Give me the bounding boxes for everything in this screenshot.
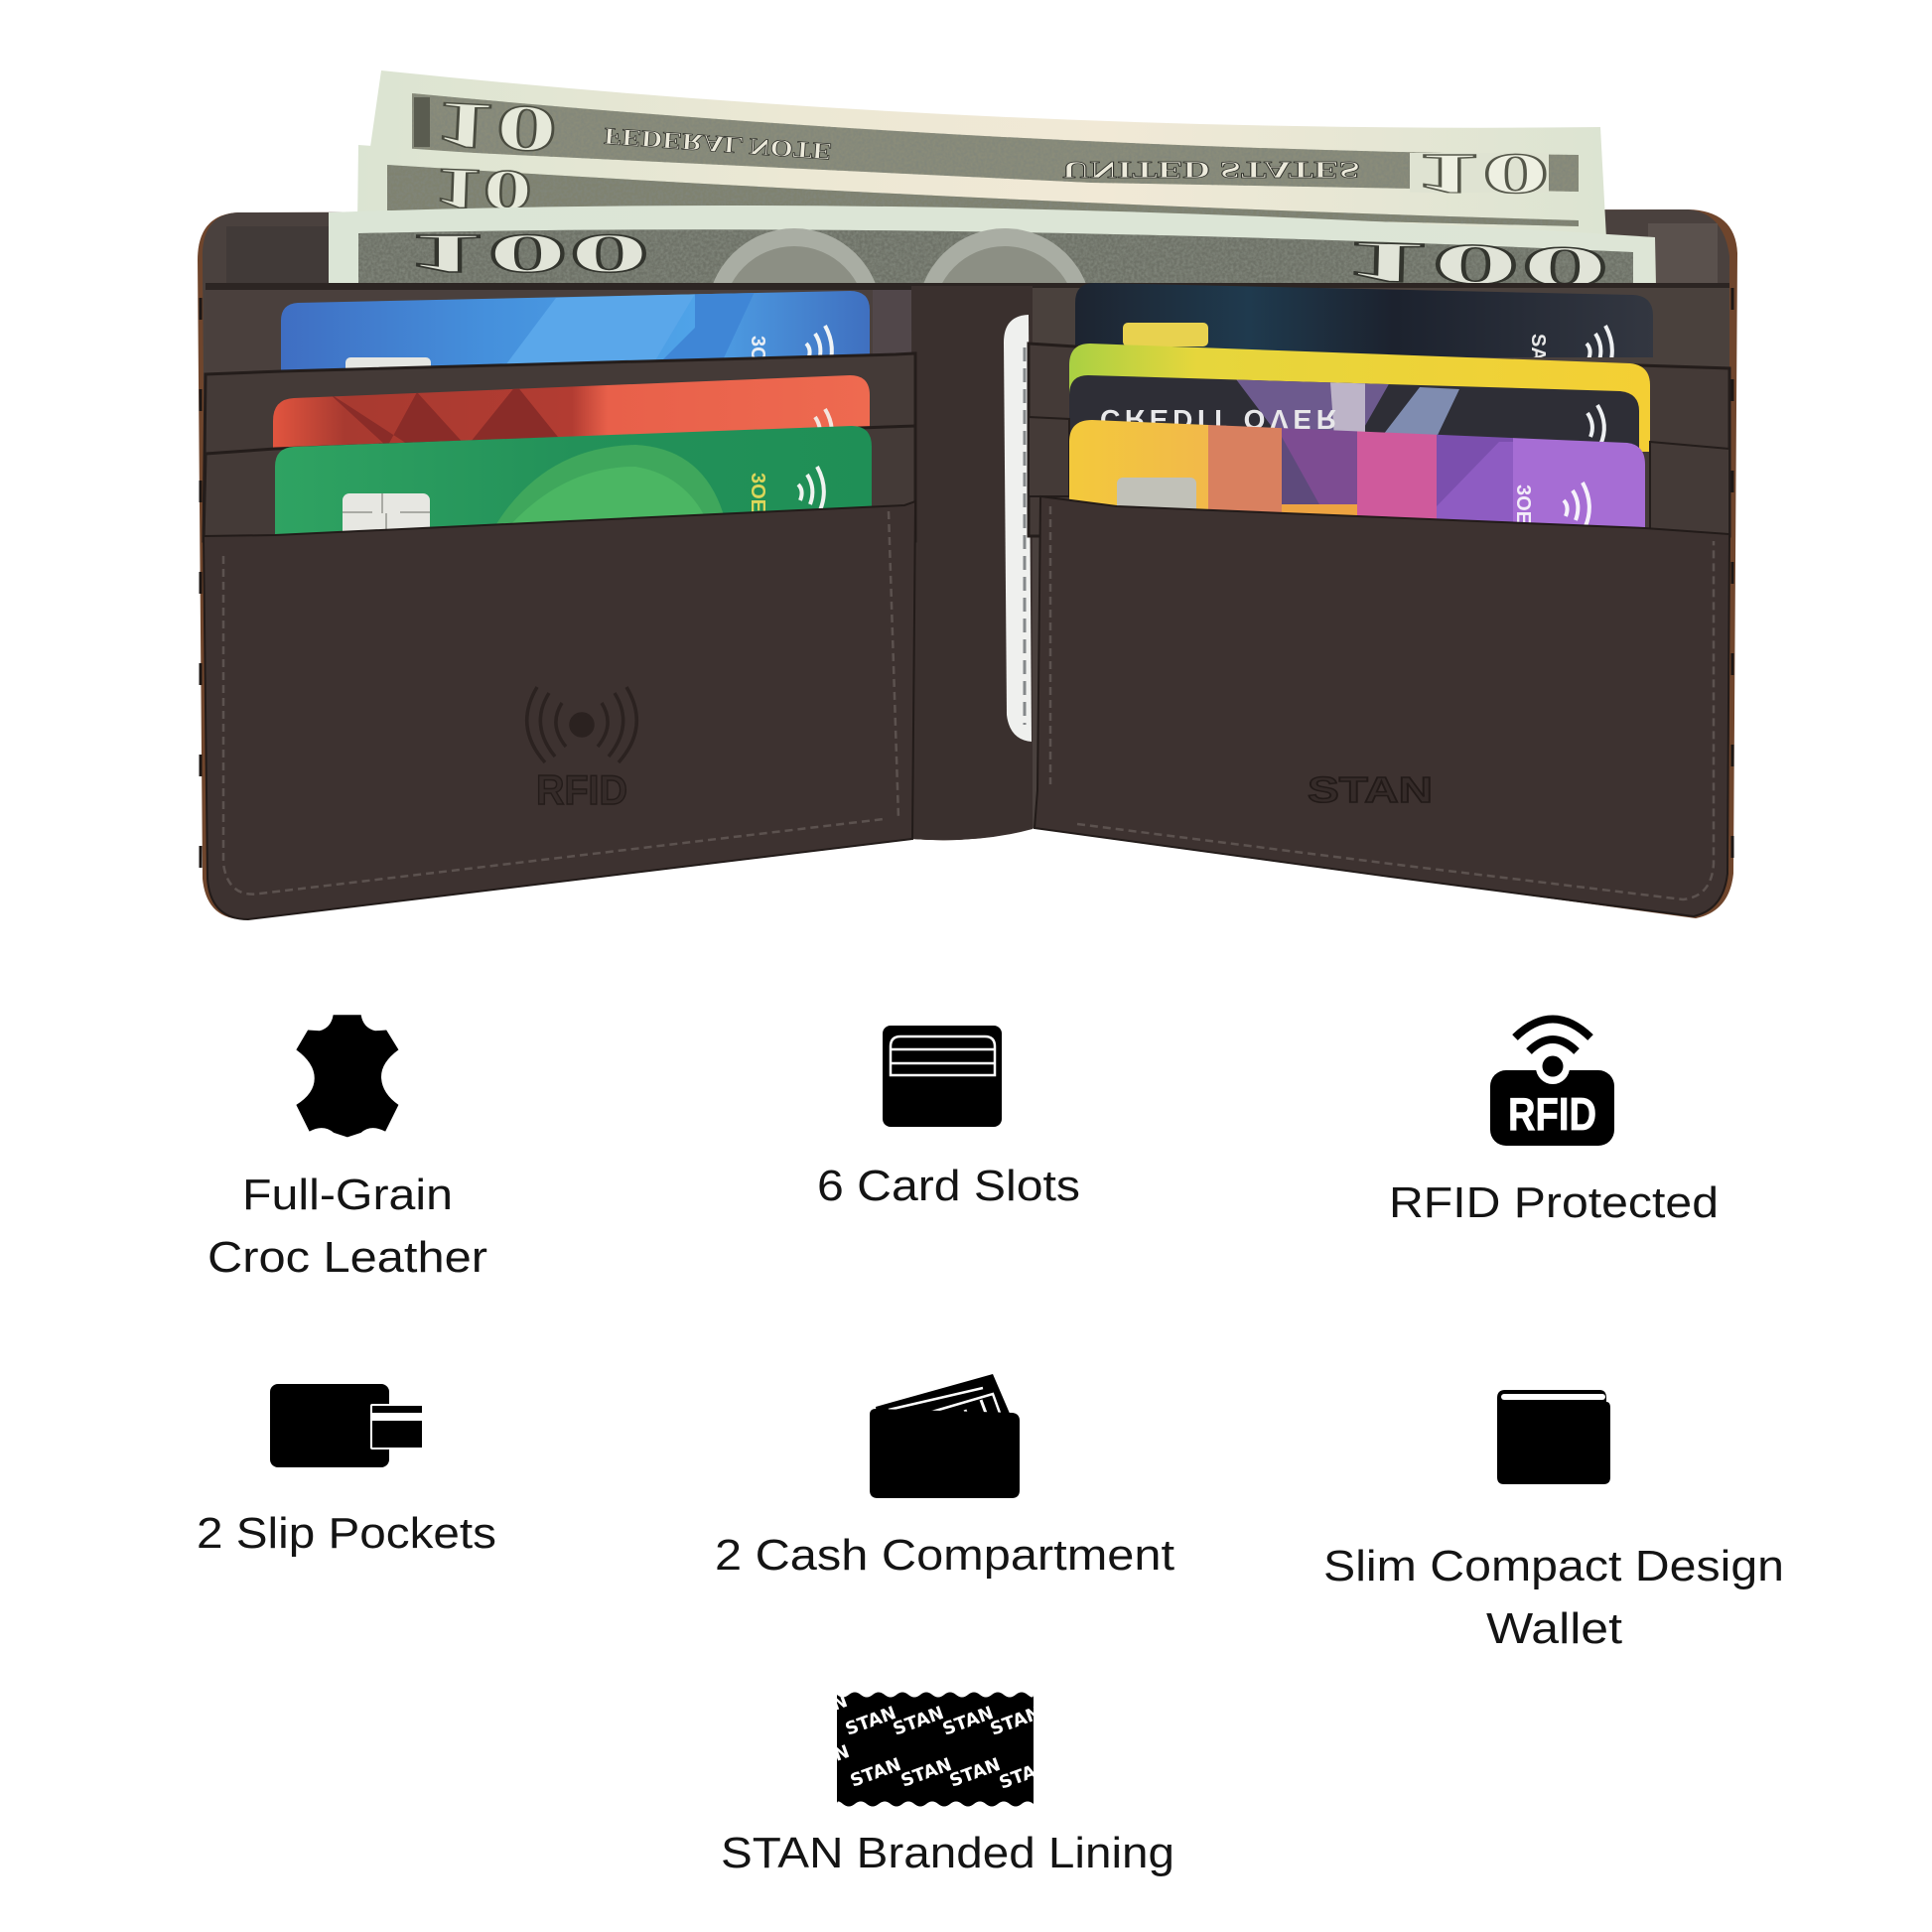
feature: full-grain croc leather (207, 1015, 487, 1282)
wallet photo (198, 70, 1737, 919)
icon: card holder (883, 1026, 1002, 1127)
right slots: dark card (1075, 283, 1653, 357)
feature: RFID protected (1389, 1019, 1719, 1227)
left slots: blue card (281, 291, 870, 369)
right slots: dark credit card (1069, 373, 1640, 453)
text: Full-Grain Croc Leather: Croc Leather (207, 1233, 487, 1282)
text: RFID emboss: RFID (536, 766, 627, 813)
text: 2 Cash Compartment: 2 Cash Compartment (715, 1531, 1174, 1580)
text: RFID Protected: RFID Protected (1389, 1178, 1719, 1227)
white card in centre slot (1004, 315, 1032, 742)
right slots: dark card: SA (1527, 334, 1549, 361)
banknote: front hundred dollar bill (329, 206, 1656, 403)
left slots: second leather band (204, 426, 915, 541)
infographic: wallet product features (198, 70, 1781, 1876)
left slots: green card: 3OE (747, 473, 768, 512)
right slots: left stitched strip (1029, 417, 1069, 496)
icon: lining swatch (837, 1692, 1034, 1807)
text: 2 Slip Pockets: 2 Slip Pockets (197, 1509, 496, 1558)
text: Full-Grain Croc Leather: Full-Grain (242, 1171, 453, 1219)
banknote: back ten dollar bill: FEDERAL NOTE (604, 122, 833, 164)
feature: slim compact design wallet (1323, 1390, 1784, 1653)
banknote: front hundred dollar bill: 100 (405, 222, 650, 284)
icon: lining swatch: STAN (947, 1754, 1004, 1792)
banknote: back ten dollar bill: 10 (1414, 142, 1550, 207)
left slots: green card (275, 425, 873, 543)
icon: slim wallet (1497, 1390, 1610, 1484)
left slots: blue card: 3OE (747, 336, 768, 375)
right slots: multicolour card: 3OE (1512, 484, 1534, 524)
left slots: red card (273, 375, 870, 448)
text: Full-Grain Croc Leather (207, 1171, 487, 1282)
right slots: second leather band (1650, 442, 1729, 536)
banknote: back ten dollar bill: UNITED STATES (1062, 156, 1360, 182)
right front pocket with STAN emboss (1035, 496, 1729, 916)
left slots: first leather band (204, 353, 915, 541)
banknote: front hundred dollar bill: 100 (1341, 229, 1610, 301)
text: Slim Compact Design Wallet: Slim Compact Design (1323, 1542, 1784, 1590)
feature: STAN branded lining (721, 1688, 1174, 1877)
banknote: middle ten dollar bill: 10 (432, 156, 533, 223)
text: Slim Compact Design Wallet: Wallet (1486, 1604, 1622, 1653)
icon: RFID emboss (527, 687, 636, 762)
right slots: first leather band (1029, 344, 1729, 536)
icon: RFID signal tag: RFID (1508, 1088, 1596, 1140)
icon: RFID signal tag (1490, 1019, 1614, 1146)
wallet interior leather (206, 283, 1729, 840)
icon: lining swatch: STAN (891, 1703, 947, 1740)
banknote: middle ten dollar bill (357, 145, 1606, 243)
right slots: dark credit card: CREDIT OVER (1100, 404, 1336, 435)
icon: lining swatch: STAN (988, 1703, 1044, 1740)
icon: wallet with cash (870, 1374, 1020, 1498)
text: 6 Card Slots: 6 Card Slots (817, 1162, 1080, 1210)
banknote: back ten dollar bill (359, 70, 1606, 238)
icon: lining swatch: STAN (997, 1756, 1053, 1794)
icon: lining swatch: STAN (843, 1703, 899, 1740)
right slots: yellow card (1069, 344, 1650, 452)
feature: 2 slip pockets (197, 1384, 496, 1558)
icon: lining swatch: STAN (794, 1691, 851, 1728)
feature: 6 card slots (817, 1026, 1080, 1210)
banknote: back ten dollar bill: 10 (432, 87, 560, 166)
text: STAN emboss: STAN (1308, 769, 1433, 810)
text: Slim Compact Design Wallet (1323, 1542, 1784, 1653)
feature: 2 cash compartment (715, 1374, 1174, 1580)
icon: lining swatch: STAN (940, 1703, 997, 1740)
icon: lining swatch: STAN (796, 1741, 853, 1779)
left front pocket with RFID emboss (204, 501, 915, 919)
icon: lining swatch: STAN (898, 1754, 955, 1792)
icon: leather hide (296, 1015, 398, 1137)
text: STAN Branded Lining: STAN Branded Lining (721, 1829, 1174, 1877)
wallet leather body (198, 209, 1737, 919)
icon: lining swatch: STAN (848, 1754, 904, 1792)
icon: pocket with card (270, 1384, 424, 1467)
right slots: multicolour card (1069, 420, 1645, 527)
